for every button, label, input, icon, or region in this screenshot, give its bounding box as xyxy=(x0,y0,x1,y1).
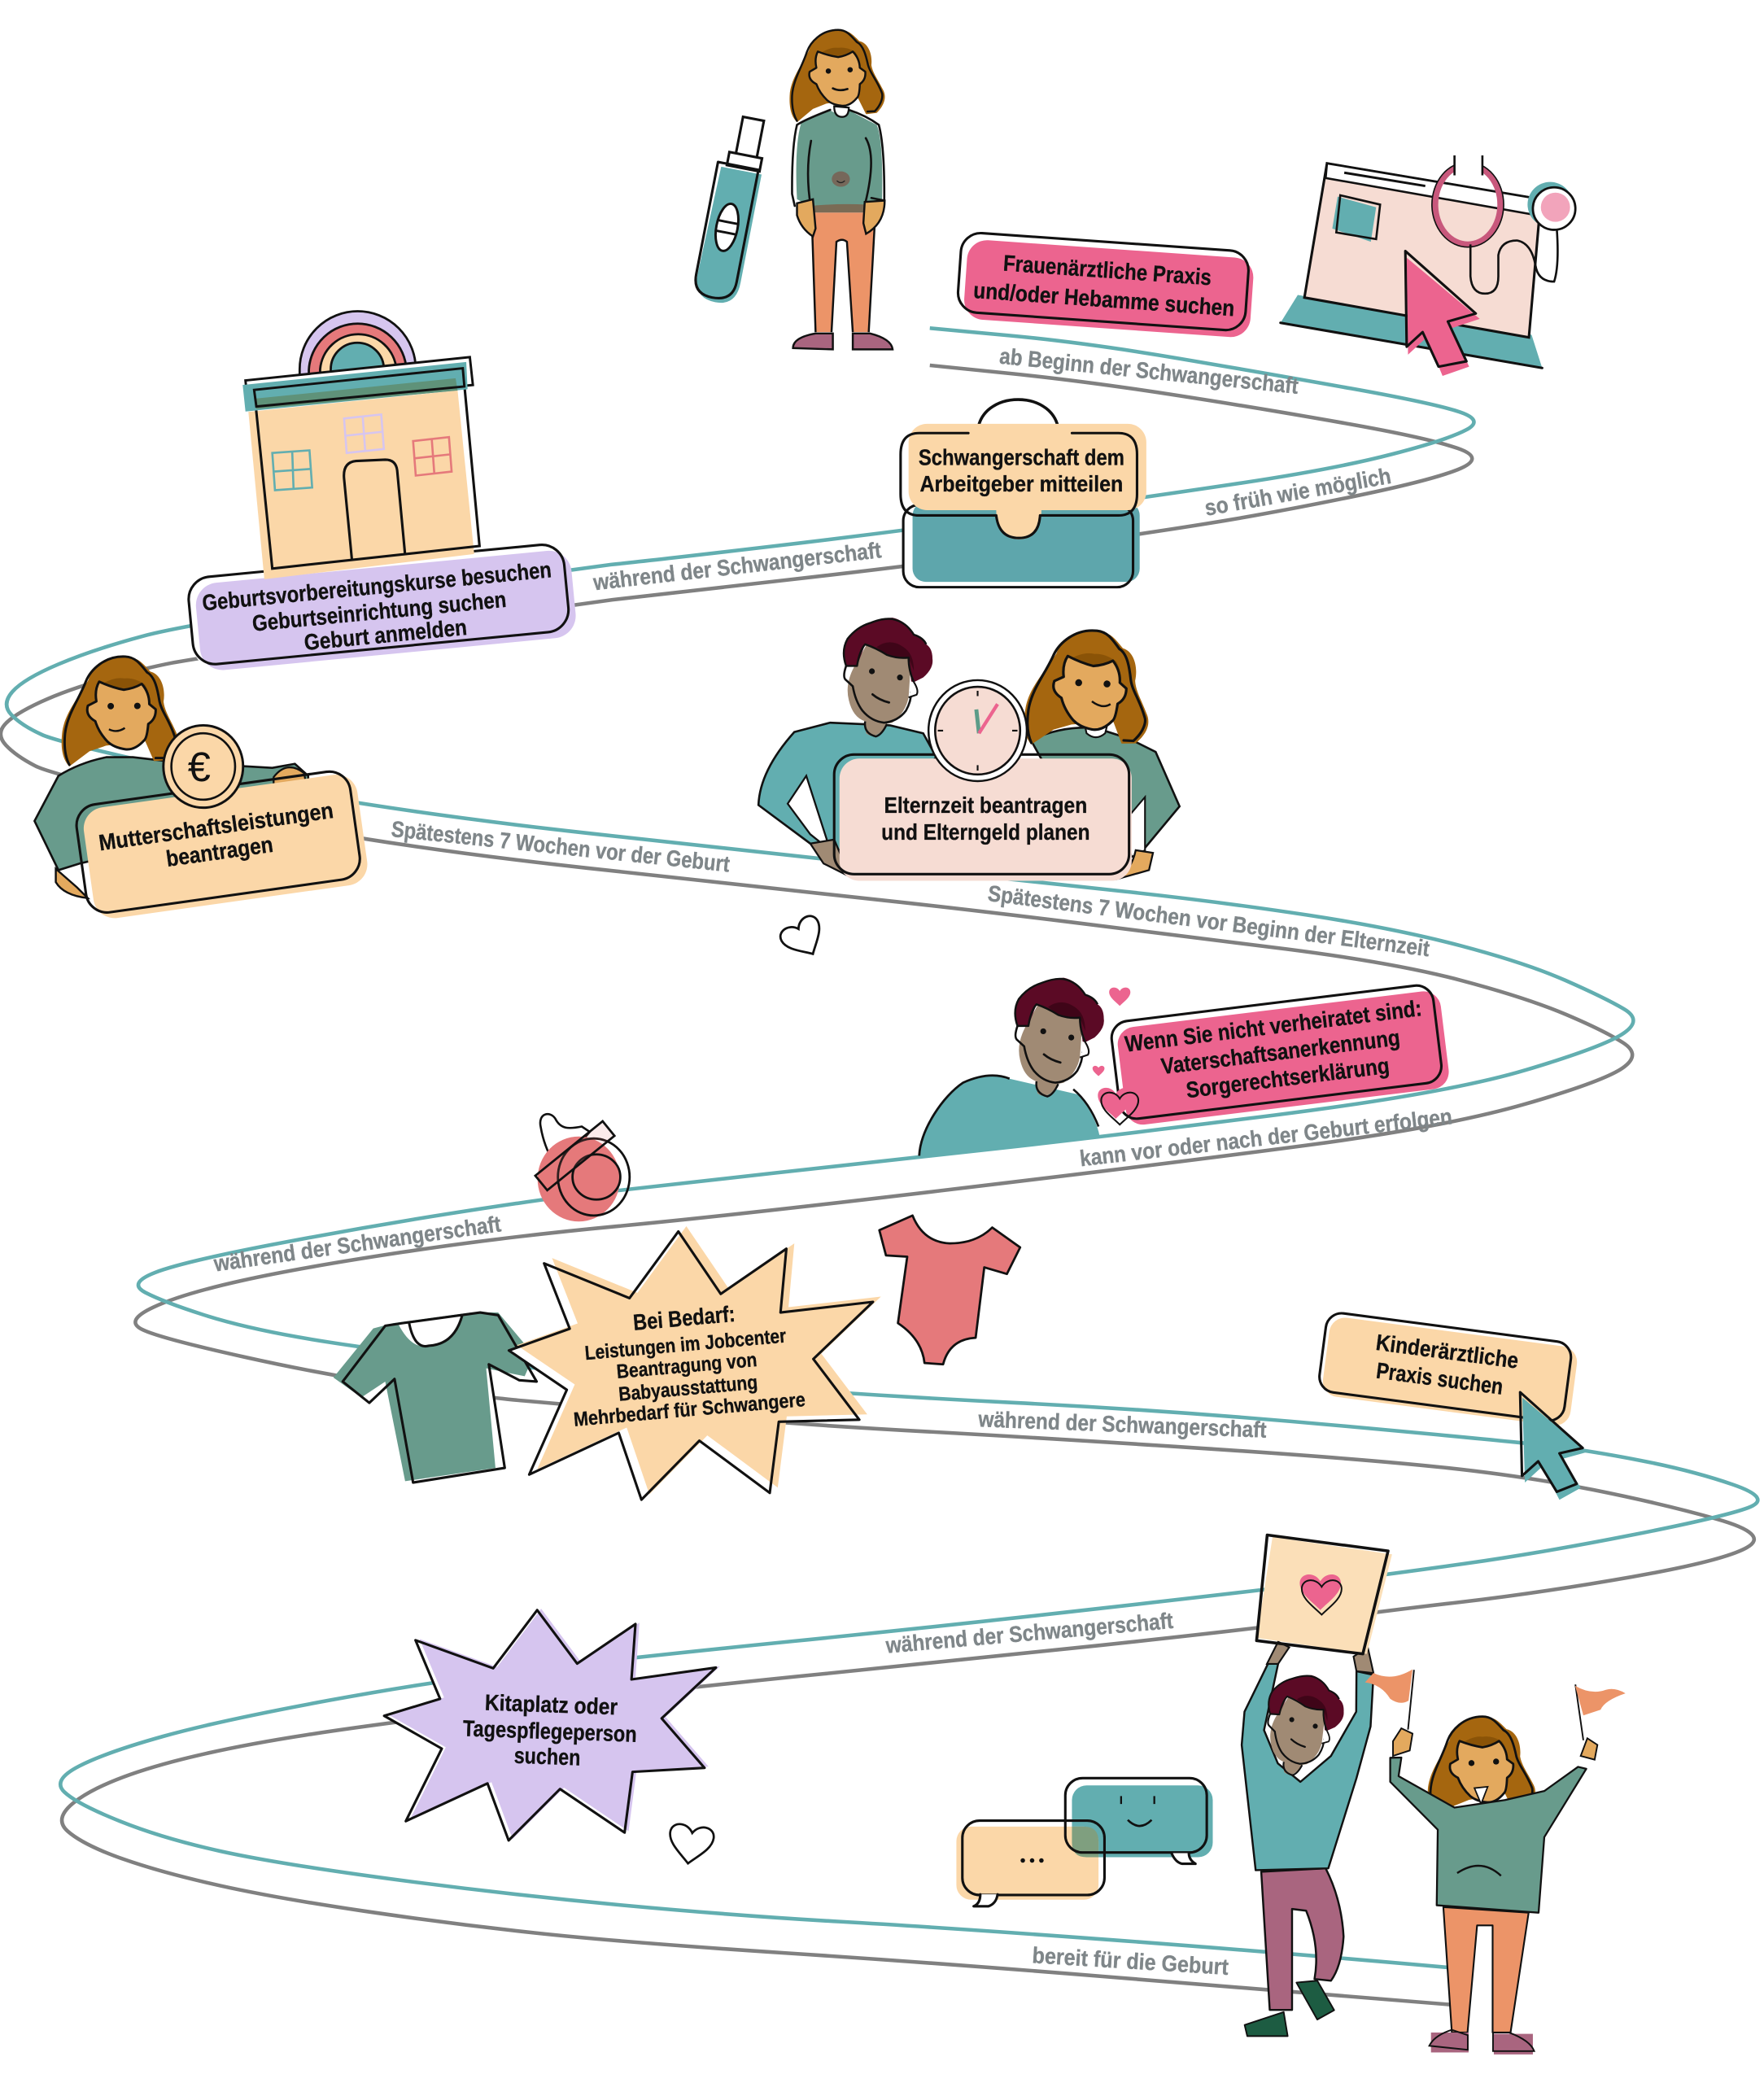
figure: woman with flags xyxy=(1365,1670,1626,2055)
figure: couple with clock and Elternzeit panel xyxy=(758,618,1180,880)
icon: teal cursor xyxy=(1520,1392,1587,1500)
timeline path: gray line xyxy=(1,365,1754,2005)
text: Arbeitgeber mitteilen: Arbeitgeber mitteilen xyxy=(920,471,1123,496)
icon: euro sign: € xyxy=(188,744,211,790)
text block: Geburtsvorbereitung lines xyxy=(201,557,557,665)
icon: outline heart small xyxy=(666,1823,715,1867)
figure: man holding heart placard xyxy=(1242,1535,1392,2036)
text: Schwangerschaft dem: Schwangerschaft dem xyxy=(919,444,1124,469)
figure: woman with coin and Mutterschaftsleistungen panel xyxy=(34,653,370,922)
text: Praxis suchen: Praxis suchen xyxy=(1375,1358,1504,1400)
text: Vaterschaftsanerkennung: Vaterschaftsanerkennung xyxy=(1159,1024,1401,1079)
icon: pregnancy test xyxy=(692,114,771,306)
panel: briefcase Arbeitgeber xyxy=(901,400,1146,587)
timeline label: so früh wie möglich: so früh wie möglich xyxy=(1203,463,1393,521)
timeline label: bereit für die Geburt: bereit für die Geburt xyxy=(1032,1942,1229,1980)
text: und Elterngeld planen: und Elterngeld planen xyxy=(881,819,1089,845)
text: Geburtsvorbereitungskurse besuchen: Geburtsvorbereitungskurse besuchen xyxy=(201,557,552,615)
panel: Geburtsvorbereitung xyxy=(186,542,578,673)
icon: green t-shirt xyxy=(334,1312,537,1483)
panel: Kitaplatz star xyxy=(384,1609,720,1841)
timeline path: teal line xyxy=(7,328,1757,1967)
figure: pregnant woman standing xyxy=(789,30,893,349)
figure: man bust xyxy=(919,978,1104,1155)
text: Tagespflegeperson: Tagespflegeperson xyxy=(462,1715,637,1747)
timeline label: während der Schwangerschaft 4: während der Schwangerschaft xyxy=(884,1608,1174,1658)
text: Mehrbedarf für Schwangere: Mehrbedarf für Schwangere xyxy=(573,1389,806,1431)
panel: Wenn Sie nicht verheiratet sind xyxy=(1110,983,1451,1127)
icon: birth house with rainbow xyxy=(242,312,479,579)
text: Frauenärztliche Praxis: Frauenärztliche Praxis xyxy=(1002,251,1212,290)
icon: fetus xyxy=(832,172,849,187)
timeline label: 7 Wochen vor der Geburt: Spätestens 7 Wochen vor der Geburt xyxy=(390,816,731,877)
timeline label: ab Beginn: ab Beginn der Schwangerschaft xyxy=(998,343,1299,399)
timeline label: während der Schwangerschaft 3: während der Schwangerschaft xyxy=(977,1406,1267,1443)
text: Kinderärztliche: Kinderärztliche xyxy=(1374,1330,1520,1373)
panel: Bei Bedarf star xyxy=(509,1226,881,1500)
text: Wenn Sie nicht verheiratet sind: Wenn Sie nicht verheiratet sind: xyxy=(1124,995,1423,1057)
text: Beantragung von: Beantragung von xyxy=(616,1349,758,1383)
icon: chat bubbles xyxy=(956,1778,1212,1906)
text: Elternzeit beantragen: Elternzeit beantragen xyxy=(884,793,1087,818)
icon: pacifier xyxy=(535,1114,630,1221)
text: Geburt anmelden: Geburt anmelden xyxy=(303,614,468,655)
icon: pink hearts xyxy=(1093,988,1138,1124)
text: beantragen: beantragen xyxy=(164,832,274,871)
timeline label: während der Schwangerschaft 1: während der Schwangerschaft xyxy=(592,537,883,595)
text: Sorgerechtserklärung: Sorgerechtserklärung xyxy=(1185,1053,1391,1103)
text: suchen: suchen xyxy=(513,1743,581,1771)
icon: baby onesie xyxy=(880,1216,1020,1365)
timeline label: während der Schwangerschaft 2: während der Schwangerschaft xyxy=(212,1211,503,1277)
text: Bei Bedarf: Bei Bedarf: xyxy=(632,1301,736,1335)
panel: Kinderärztliche Praxis xyxy=(1317,1312,1579,1427)
panel: Frauenärztliche Praxis xyxy=(956,232,1255,338)
text: Leistungen im Jobcenter: Leistungen im Jobcenter xyxy=(584,1325,788,1365)
text: Kitaplatz oder: Kitaplatz oder xyxy=(484,1690,618,1719)
text: Babyausstattung: Babyausstattung xyxy=(618,1372,758,1406)
text: Geburtseinrichtung suchen: Geburtseinrichtung suchen xyxy=(251,587,508,636)
text: Mutterschaftsleistungen: Mutterschaftsleistungen xyxy=(97,797,335,855)
icon: outline heart xyxy=(777,913,831,964)
timeline label: 7 Wochen vor Beginn der Elternzeit: Spätestens 7 Wochen vor Beginn der Elternzeit xyxy=(986,880,1431,961)
icon: tablet with stethoscope and cursor xyxy=(1281,155,1575,376)
timeline label: kann vor oder nach der Geburt: kann vor oder nach der Geburt erfolgen xyxy=(1078,1103,1453,1171)
text: und/oder Hebamme suchen: und/oder Hebamme suchen xyxy=(972,277,1235,321)
